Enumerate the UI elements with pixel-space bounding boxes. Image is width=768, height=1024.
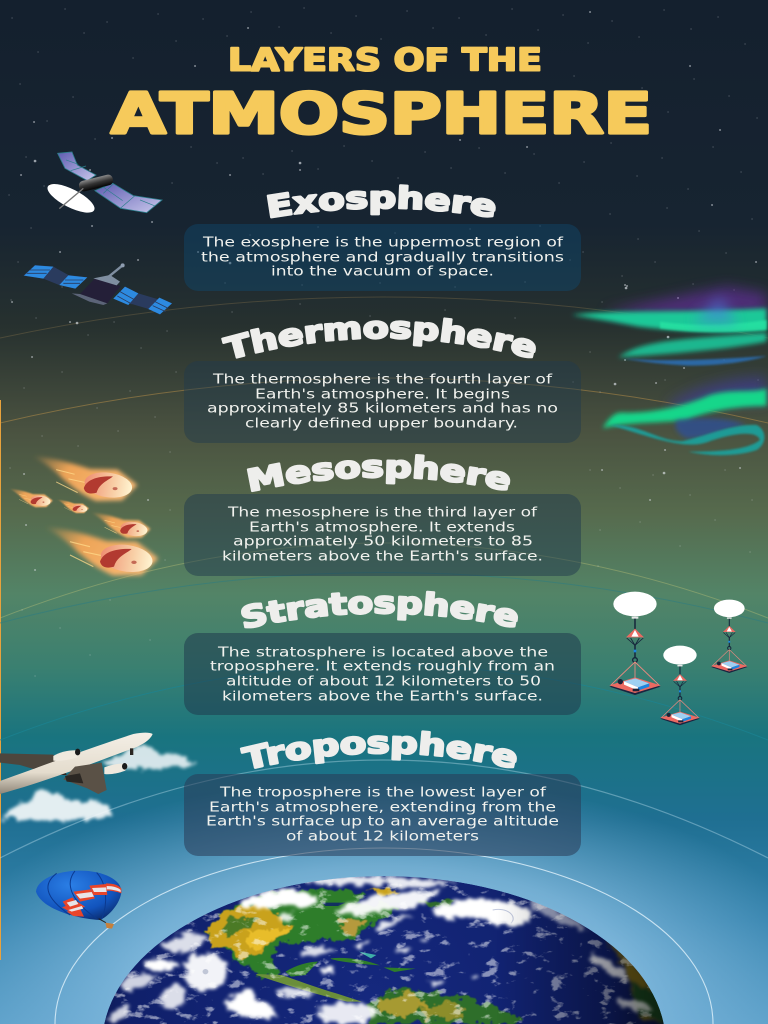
text block: stratosphere description: troposphere. It extends roughly from an xyxy=(210,660,555,674)
text block: thermosphere description xyxy=(207,372,558,432)
text block: troposphere description: Earth's surface up to an average altitude xyxy=(206,814,559,830)
text block: mesosphere description: The mesosphere is the third layer of xyxy=(227,506,538,520)
text block: thermosphere description: The thermosphere is the fourth layer of xyxy=(212,372,553,388)
icon: meteors xyxy=(9,456,158,576)
text block: troposphere description xyxy=(206,786,559,844)
icon: clouds xyxy=(2,744,195,821)
text block: exosphere description: the atmosphere and gradually transitions xyxy=(201,250,564,266)
text block: thermosphere description: clearly defined upper boundary. xyxy=(245,416,518,432)
Central America xyxy=(256,974,362,1002)
text block: stratosphere description: kilometers above the Earth's surface. xyxy=(222,690,543,704)
text block: troposphere description: of about 12 kilometers xyxy=(286,830,479,844)
text block: troposphere description: The troposphere is the lowest layer of xyxy=(219,786,547,800)
exosphere section xyxy=(184,184,581,291)
text block: exosphere description: into the vacuum of space. xyxy=(271,264,494,280)
text block: mesosphere description: kilometers above the Earth's surface. xyxy=(222,550,543,564)
panel: troposphere text xyxy=(184,774,581,856)
text block: exosphere description xyxy=(201,236,564,280)
aurora xyxy=(572,287,767,455)
text block: stratosphere description: altitude of about 12 kilometers to 50 xyxy=(226,674,541,690)
text block: stratosphere description: The stratosphere is located above the xyxy=(217,646,548,660)
text block: thermosphere description: Earth's atmosphere. It begins xyxy=(255,388,510,402)
North America xyxy=(205,888,456,975)
title line: atmosphere: ATMOSPHERE xyxy=(111,82,652,147)
panel: exosphere text xyxy=(184,224,581,291)
heading: exosphere: Exosphere xyxy=(266,184,496,218)
panel: stratosphere text xyxy=(184,633,581,715)
text block: exosphere description: The exosphere is the uppermost region of xyxy=(202,236,564,250)
icon: weather balloons xyxy=(609,592,747,725)
glow around the Earth xyxy=(0,780,768,1024)
stratosphere section xyxy=(184,590,581,715)
Earth xyxy=(104,876,664,1024)
panel: mesosphere text xyxy=(184,494,581,576)
title xyxy=(111,42,652,147)
South America xyxy=(369,989,524,1023)
text block: mesosphere description: Earth's atmosphere. It extends xyxy=(249,520,515,536)
thermosphere section xyxy=(184,317,581,443)
Africa edge xyxy=(606,940,664,1024)
title line: layers of the: LAYERS OF THE xyxy=(228,42,542,78)
heading: thermosphere: Thermosphere xyxy=(221,317,536,359)
clouds xyxy=(109,876,651,1023)
icon: satellite with dish xyxy=(44,152,162,218)
icon: blue panel satellite xyxy=(23,263,172,314)
Cuba and islands xyxy=(331,958,416,972)
icon: airplane xyxy=(0,733,153,794)
heading: troposphere: Troposphere xyxy=(240,730,517,769)
atmosphere layer boundary arcs xyxy=(0,297,768,1024)
heading: mesosphere: Mesosphere xyxy=(246,454,510,492)
heading: stratosphere: Stratosphere xyxy=(241,590,518,628)
text block: troposphere description: Earth's atmosphere, extending from the xyxy=(209,800,556,816)
icon: hot air balloon xyxy=(36,871,121,929)
stars xyxy=(9,8,758,676)
text block: stratosphere description xyxy=(210,646,555,704)
panel: thermosphere text xyxy=(184,361,581,443)
text block: mesosphere description: approximately 50 kilometers to 85 xyxy=(233,534,533,550)
text block: mesosphere description xyxy=(222,506,543,564)
mesosphere section xyxy=(184,454,581,576)
text block: thermosphere description: approximately 85 kilometers and has no xyxy=(207,402,558,416)
troposphere section xyxy=(184,730,581,856)
